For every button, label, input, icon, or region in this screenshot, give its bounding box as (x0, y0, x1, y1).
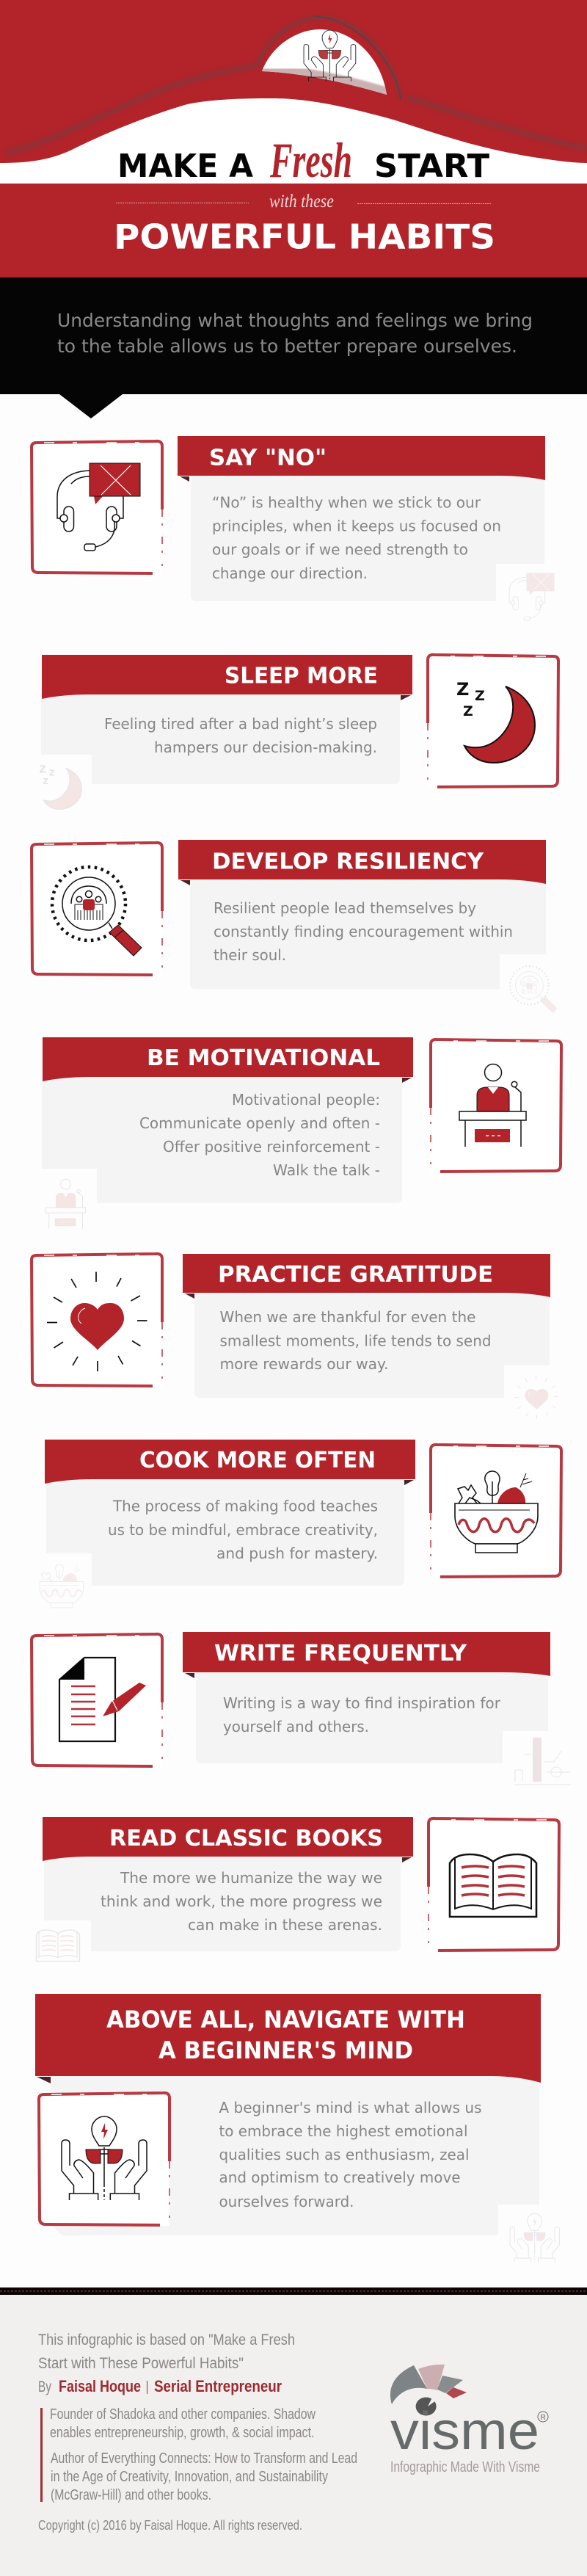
white dome (262, 29, 387, 97)
icon: moon and z's: Z (463, 703, 473, 719)
icon frame (32, 843, 162, 976)
body text: Writing is a way to find inspiration for (223, 1694, 501, 1712)
ghost icon: moon (39, 765, 81, 809)
section: write frequently (32, 1632, 571, 1785)
banner (178, 840, 546, 885)
body text: Walk the talk - (273, 1161, 380, 1179)
ghost icon: chart (514, 1738, 571, 1785)
subtitle: with these: with these (269, 192, 334, 211)
hill shadow (6, 16, 587, 153)
icon frame (431, 1445, 561, 1578)
banner: SLEEP MORE (225, 664, 378, 689)
body text: principles, when it keeps us focused on (212, 518, 501, 535)
visme logo (390, 2365, 548, 2475)
ghost icon: headset (509, 573, 554, 620)
source text (38, 2332, 295, 2395)
body text (101, 1869, 382, 1934)
copyright: Copyright (c) 2016 by Faisal Hoque. All rights reserved. (38, 2518, 302, 2533)
bio text: enables entrepreneurship, growth, & social impact. (50, 2425, 314, 2441)
bio text: Founder of Shadoka and other companies. Shadow (50, 2406, 316, 2423)
icon frame (431, 1040, 561, 1172)
ghost icon: magnifier (510, 966, 557, 1013)
icon: open book (450, 1854, 536, 1917)
footer (0, 2287, 587, 2576)
body text: Resilient people lead themselves by (214, 899, 476, 917)
body text (104, 715, 377, 756)
banner (183, 1254, 550, 1299)
body text (139, 1091, 380, 1179)
body text (212, 493, 501, 582)
body text: When we are thankful for even the (220, 1308, 475, 1326)
text panel (46, 1479, 404, 1586)
bio accent bar (40, 2408, 43, 2502)
section: read classic books (37, 1817, 559, 1962)
title: powerful habits: POWERFUL HABITS (114, 217, 495, 257)
intro text (57, 310, 533, 357)
banner: PRACTICE GRATITUDE (218, 1262, 493, 1288)
bio text: Author of Everything Connects: How to Transform and Lead (51, 2450, 357, 2467)
text panel (42, 1077, 402, 1203)
section: cook more often (40, 1440, 561, 1608)
icon frame (32, 1634, 162, 1767)
title: fresh: Fresh (269, 132, 352, 188)
body text (220, 1308, 492, 1373)
intro text: to the table allows us to better prepare ourselves. (57, 335, 517, 357)
ghost icon: speaker (45, 1179, 86, 1229)
body text: A beginner's mind is what allows us (219, 2099, 481, 2116)
banner (43, 1817, 413, 1862)
body text: ourselves forward. (219, 2193, 354, 2210)
body text: and push for mastery. (216, 1545, 378, 1562)
icon: hands, leaves and light bulb (62, 2116, 147, 2200)
body text: qualities such as enthusiasm, zeal (219, 2146, 470, 2163)
ghost icon: book (37, 1930, 79, 1962)
body text: “No” is healthy when we stick to our (212, 493, 481, 511)
intro band (0, 277, 587, 418)
banner: WRITE FREQUENTLY (214, 1641, 467, 1666)
body text: their soul. (214, 946, 286, 964)
body text: us to be mindful, embrace creativity, (108, 1521, 378, 1539)
section: say no (32, 436, 554, 620)
source text: By (38, 2379, 51, 2395)
body text: The more we humanize the way we (120, 1869, 382, 1887)
banner (178, 436, 545, 482)
text panel (191, 476, 544, 601)
banner: DEVELOP RESILIENCY (212, 849, 484, 875)
icon: document and pen (59, 1658, 146, 1741)
body text: think and work, the more progress we (101, 1893, 382, 1910)
body text: Motivational people: (232, 1091, 380, 1109)
section: develop resiliency (32, 840, 557, 1013)
banner: COOK MORE OFTEN (139, 1448, 376, 1473)
header (0, 0, 587, 277)
source text: This infographic is based on "Make a Fresh (38, 2332, 295, 2348)
intro text: Understanding what thoughts and feelings we bring (57, 310, 533, 331)
icon frame (32, 441, 162, 574)
body text: Feeling tired after a bad night’s sleep (104, 715, 377, 733)
ghost icon: heart (514, 1375, 558, 1419)
banner (42, 655, 412, 700)
body text: yourself and others. (223, 1718, 369, 1735)
icon: magnifier with people (52, 867, 142, 956)
body text: hampers our decision-making. (154, 739, 377, 756)
ghost icon: bowl (40, 1564, 84, 1608)
body text (214, 899, 513, 964)
text panel (196, 1672, 548, 1763)
header icon: hands and bulb (304, 30, 356, 81)
white wave (0, 98, 587, 184)
banner: ABOVE ALL, NAVIGATE WITH (106, 2006, 465, 2033)
body text (223, 1694, 501, 1735)
section: be motivational (42, 1037, 561, 1229)
icon frame (429, 1818, 559, 1951)
bio text: (McGraw-Hill) and other books. (51, 2487, 211, 2503)
body text: to embrace the highest emotional (219, 2122, 468, 2140)
author name: Serial Entrepreneur (154, 2377, 282, 2395)
visme logo: Infographic Made With Visme (390, 2459, 540, 2475)
body text: change our direction. (212, 565, 368, 582)
author name (59, 2377, 282, 2395)
text panel (44, 1857, 401, 1951)
title: make a: MAKE A (117, 148, 253, 185)
body text: Offer positive reinforcement - (163, 1138, 380, 1155)
icon: headset with speech bubble (57, 463, 140, 551)
banner (183, 1632, 550, 1678)
bio text: in the Age of Creativity, Innovation, and Sustainability (51, 2469, 328, 2485)
red header background (0, 0, 587, 184)
black band (0, 277, 587, 418)
icon: heart with rays (47, 1271, 147, 1371)
ghost icon: hands (510, 2213, 559, 2262)
body text: can make in these arenas. (188, 1916, 382, 1934)
body text: and optimism to creatively move (219, 2169, 461, 2186)
author name: Faisal Hoque (59, 2377, 141, 2395)
banner: SAY "NO" (209, 446, 327, 471)
body text: smallest moments, life tends to send (220, 1332, 492, 1350)
visme logo: R (540, 2414, 546, 2422)
body text (219, 2099, 481, 2210)
icon frame (39, 2093, 169, 2226)
section: beginner's mind (35, 1994, 559, 2262)
icon: moon and z's: Z (456, 679, 469, 700)
banner (35, 1994, 541, 2083)
body text (108, 1498, 378, 1562)
icon: speaker at podium (459, 1064, 526, 1147)
footer background (0, 2295, 587, 2576)
banner: BE MOTIVATIONAL (147, 1045, 380, 1071)
icon: moon and z's (456, 679, 535, 763)
icon: bowl of vegetables (455, 1471, 538, 1553)
icon frame (32, 1254, 162, 1387)
body text: The process of making food teaches (112, 1498, 378, 1515)
text panel (41, 694, 400, 784)
text panel (51, 2076, 539, 2235)
icon frame (428, 655, 558, 788)
banner: READ CLASSIC BOOKS (109, 1826, 383, 1851)
body text: more rewards our way. (220, 1355, 389, 1373)
source text: Start with These Powerful Habits" (38, 2355, 244, 2372)
text panel (190, 879, 546, 990)
banner (45, 1440, 415, 1485)
visme logo: visme (390, 2402, 539, 2461)
body text: constantly finding encouragement within (214, 923, 513, 940)
text panel (194, 1293, 550, 1398)
section: practice gratitude (32, 1254, 558, 1419)
dark strip (0, 2287, 587, 2295)
red title band (0, 184, 587, 277)
icon: moon and z's: Z (475, 688, 485, 704)
body text: Communicate openly and often - (139, 1114, 380, 1132)
body text: our goals or if we need strength to (212, 541, 468, 559)
banner (43, 1037, 413, 1083)
banner: A BEGINNER'S MIND (158, 2036, 413, 2064)
section: sleep more (39, 655, 558, 809)
title: start: START (374, 148, 489, 185)
subtitle rules (116, 203, 491, 204)
bio text (50, 2406, 357, 2503)
